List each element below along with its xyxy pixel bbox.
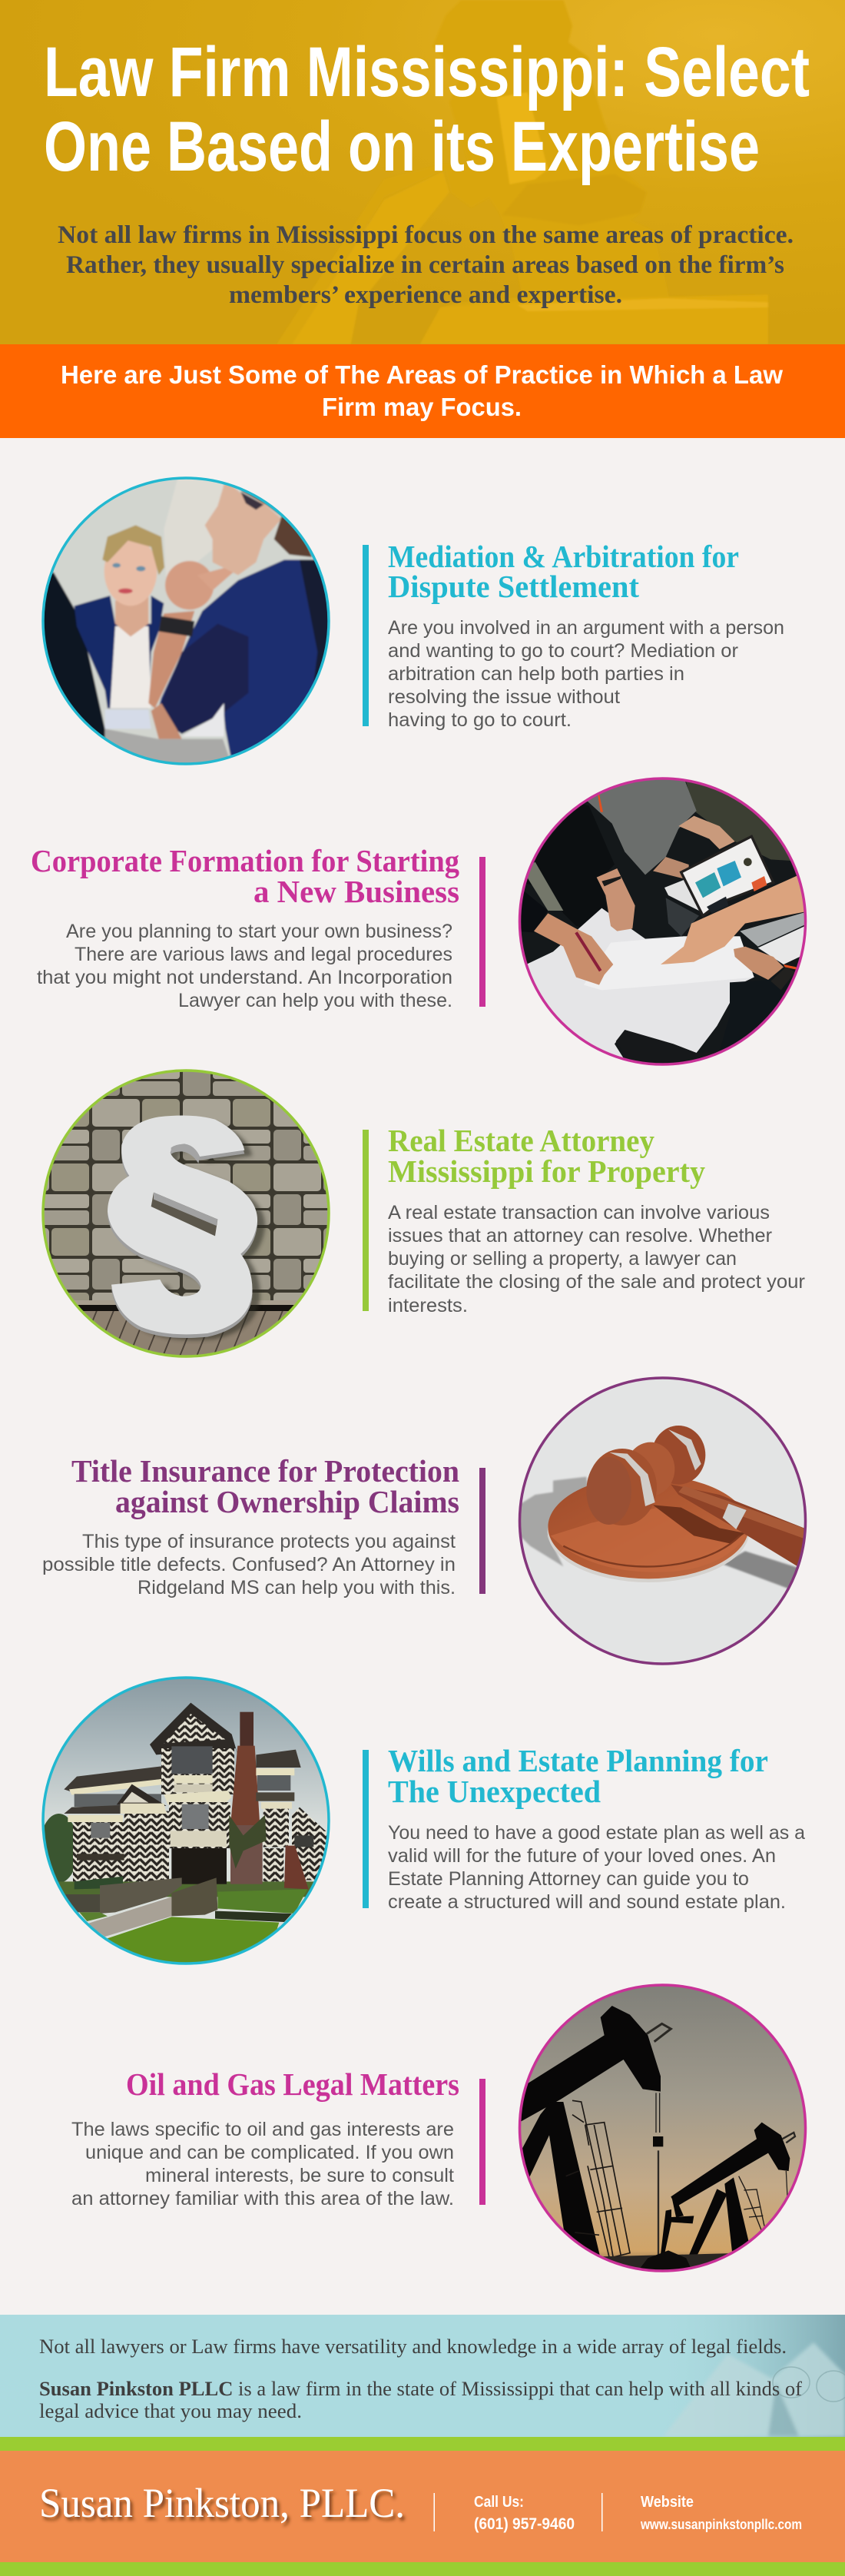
heading xyxy=(388,1123,705,1189)
photo: open book and glasses xyxy=(654,2315,845,2437)
phone contact: Call Us: xyxy=(474,2494,524,2511)
photo: two women in a meeting xyxy=(38,473,334,768)
body text xyxy=(388,617,784,731)
body text: Estate Planning Attorney can guide you to xyxy=(388,1868,749,1890)
bottom green stripe xyxy=(0,2562,845,2576)
body text: arbitration can help both parties in xyxy=(388,663,684,685)
body text: that you might not understand. An Incorporation xyxy=(37,967,452,988)
body text xyxy=(388,1202,805,1316)
body text xyxy=(388,1822,805,1913)
body text: Lawyer can help you with these. xyxy=(178,990,452,1011)
body text: create a structured will and sound estate plan. xyxy=(388,1891,786,1913)
body text: Are you involved in an argument with a person xyxy=(388,617,784,639)
intro paragraph: Not all law firms in Mississippi focus on the same areas of practice. xyxy=(58,221,794,249)
closing note panel xyxy=(0,2315,845,2437)
heading xyxy=(388,1743,768,1809)
accent bar xyxy=(479,2079,485,2205)
heading xyxy=(71,1453,459,1519)
orange banner xyxy=(0,344,845,438)
heading: Corporate Formation for Starting xyxy=(31,843,459,878)
orange banner: Firm may Focus. xyxy=(322,393,522,421)
body text xyxy=(37,921,452,1011)
hero background: gavel photo tint xyxy=(0,0,845,344)
accent bar xyxy=(363,545,369,726)
photo: timber framed manor house xyxy=(38,1671,334,1971)
photo: oil pumpjacks at sunset xyxy=(515,1979,810,2275)
body text: resolving the issue without xyxy=(388,686,620,708)
heading: Wills and Estate Planning for xyxy=(388,1743,768,1778)
body text: having to go to court. xyxy=(388,709,572,731)
heading: Real Estate Attorney xyxy=(388,1123,654,1158)
heading: Mediation & Arbitration for xyxy=(388,539,739,574)
orange banner: Here are Just Some of The Areas of Practice in Which a Law xyxy=(61,360,783,389)
heading xyxy=(388,539,739,604)
body text xyxy=(71,2119,454,2209)
intro paragraph: members’ experience and expertise. xyxy=(229,281,622,309)
heading: a New Business xyxy=(254,874,459,909)
body text: You need to have a good estate plan as well as a xyxy=(388,1822,805,1844)
footer panel xyxy=(0,2451,845,2562)
note text: legal advice that you may need. xyxy=(39,2400,302,2422)
body text: possible title defects. Confused? An Attorney in xyxy=(42,1554,456,1575)
body text: Are you planning to start your own business? xyxy=(66,921,452,942)
header panel xyxy=(0,0,845,344)
body text: interests. xyxy=(388,1295,468,1316)
body text: A real estate transaction can involve various xyxy=(388,1202,770,1223)
heading xyxy=(31,843,459,909)
panel: mediation and arbitration xyxy=(38,473,784,768)
photo: wooden gavel on sound block xyxy=(515,1372,810,1668)
body text xyxy=(42,1531,456,1598)
panel: real estate attorney xyxy=(38,1064,805,1365)
intro paragraph: Rather, they usually specialize in certain areas based on the firm’s xyxy=(66,251,784,279)
panel: title insurance xyxy=(42,1372,810,1668)
heading: Oil and Gas Legal Matters xyxy=(126,2066,459,2102)
website contact xyxy=(640,2494,802,2532)
phone contact: (601) 957-9460 xyxy=(474,2515,575,2533)
panel: wills and estate planning xyxy=(38,1671,805,1971)
accent bar xyxy=(479,1468,485,1594)
website contact: www.susanpinkstonpllc.com xyxy=(640,2517,802,2532)
body text: valid will for the future of your loved ones. An xyxy=(388,1845,776,1867)
body text: This type of insurance protects you against xyxy=(82,1531,456,1552)
body text: buying or selling a property, a lawyer can xyxy=(388,1248,737,1270)
heading: Mississippi for Property xyxy=(388,1154,705,1189)
body text: mineral interests, be sure to consult xyxy=(145,2165,454,2186)
panel: corporate formation xyxy=(31,772,810,1068)
accent bar xyxy=(363,1130,369,1311)
intro paragraph xyxy=(58,221,794,309)
body text: and wanting to go to court? Mediation or xyxy=(388,640,738,662)
website contact: Website xyxy=(641,2494,694,2511)
body text: The laws specific to oil and gas interests are xyxy=(71,2119,454,2140)
note text: Susan Pinkston PLLC is a law firm in the state of Mississippi that can help with all kinds of xyxy=(39,2378,802,2400)
photo: section symbol against stone wall xyxy=(38,1064,334,1365)
body text: an attorney familiar with this area of the law. xyxy=(71,2188,454,2209)
body text: facilitate the closing of the sale and protect your xyxy=(388,1271,805,1293)
body text: unique and can be complicated. If you own xyxy=(85,2142,454,2163)
accent bar xyxy=(363,1750,369,1908)
phone contact xyxy=(474,2494,575,2533)
panel: oil and gas xyxy=(71,1979,810,2275)
photo: team reviewing documents xyxy=(515,772,810,1068)
note text xyxy=(39,2335,802,2422)
heading: against Ownership Claims xyxy=(115,1484,459,1519)
green stripe xyxy=(0,2437,845,2451)
firm logo text: Susan Pinkston, PLLC. xyxy=(39,2480,405,2526)
body text: There are various laws and legal procedures xyxy=(75,944,452,965)
main title xyxy=(44,33,810,186)
body text: Ridgeland MS can help you with this. xyxy=(138,1577,456,1598)
heading: Dispute Settlement xyxy=(388,569,639,604)
body text: issues that an attorney can resolve. Whether xyxy=(388,1225,772,1247)
heading: The Unexpected xyxy=(388,1774,601,1809)
note text: Not all lawyers or Law firms have versatility and knowledge in a wide array of legal fields. xyxy=(39,2335,787,2358)
accent bar xyxy=(479,857,485,1007)
heading: Title Insurance for Protection xyxy=(71,1453,459,1489)
